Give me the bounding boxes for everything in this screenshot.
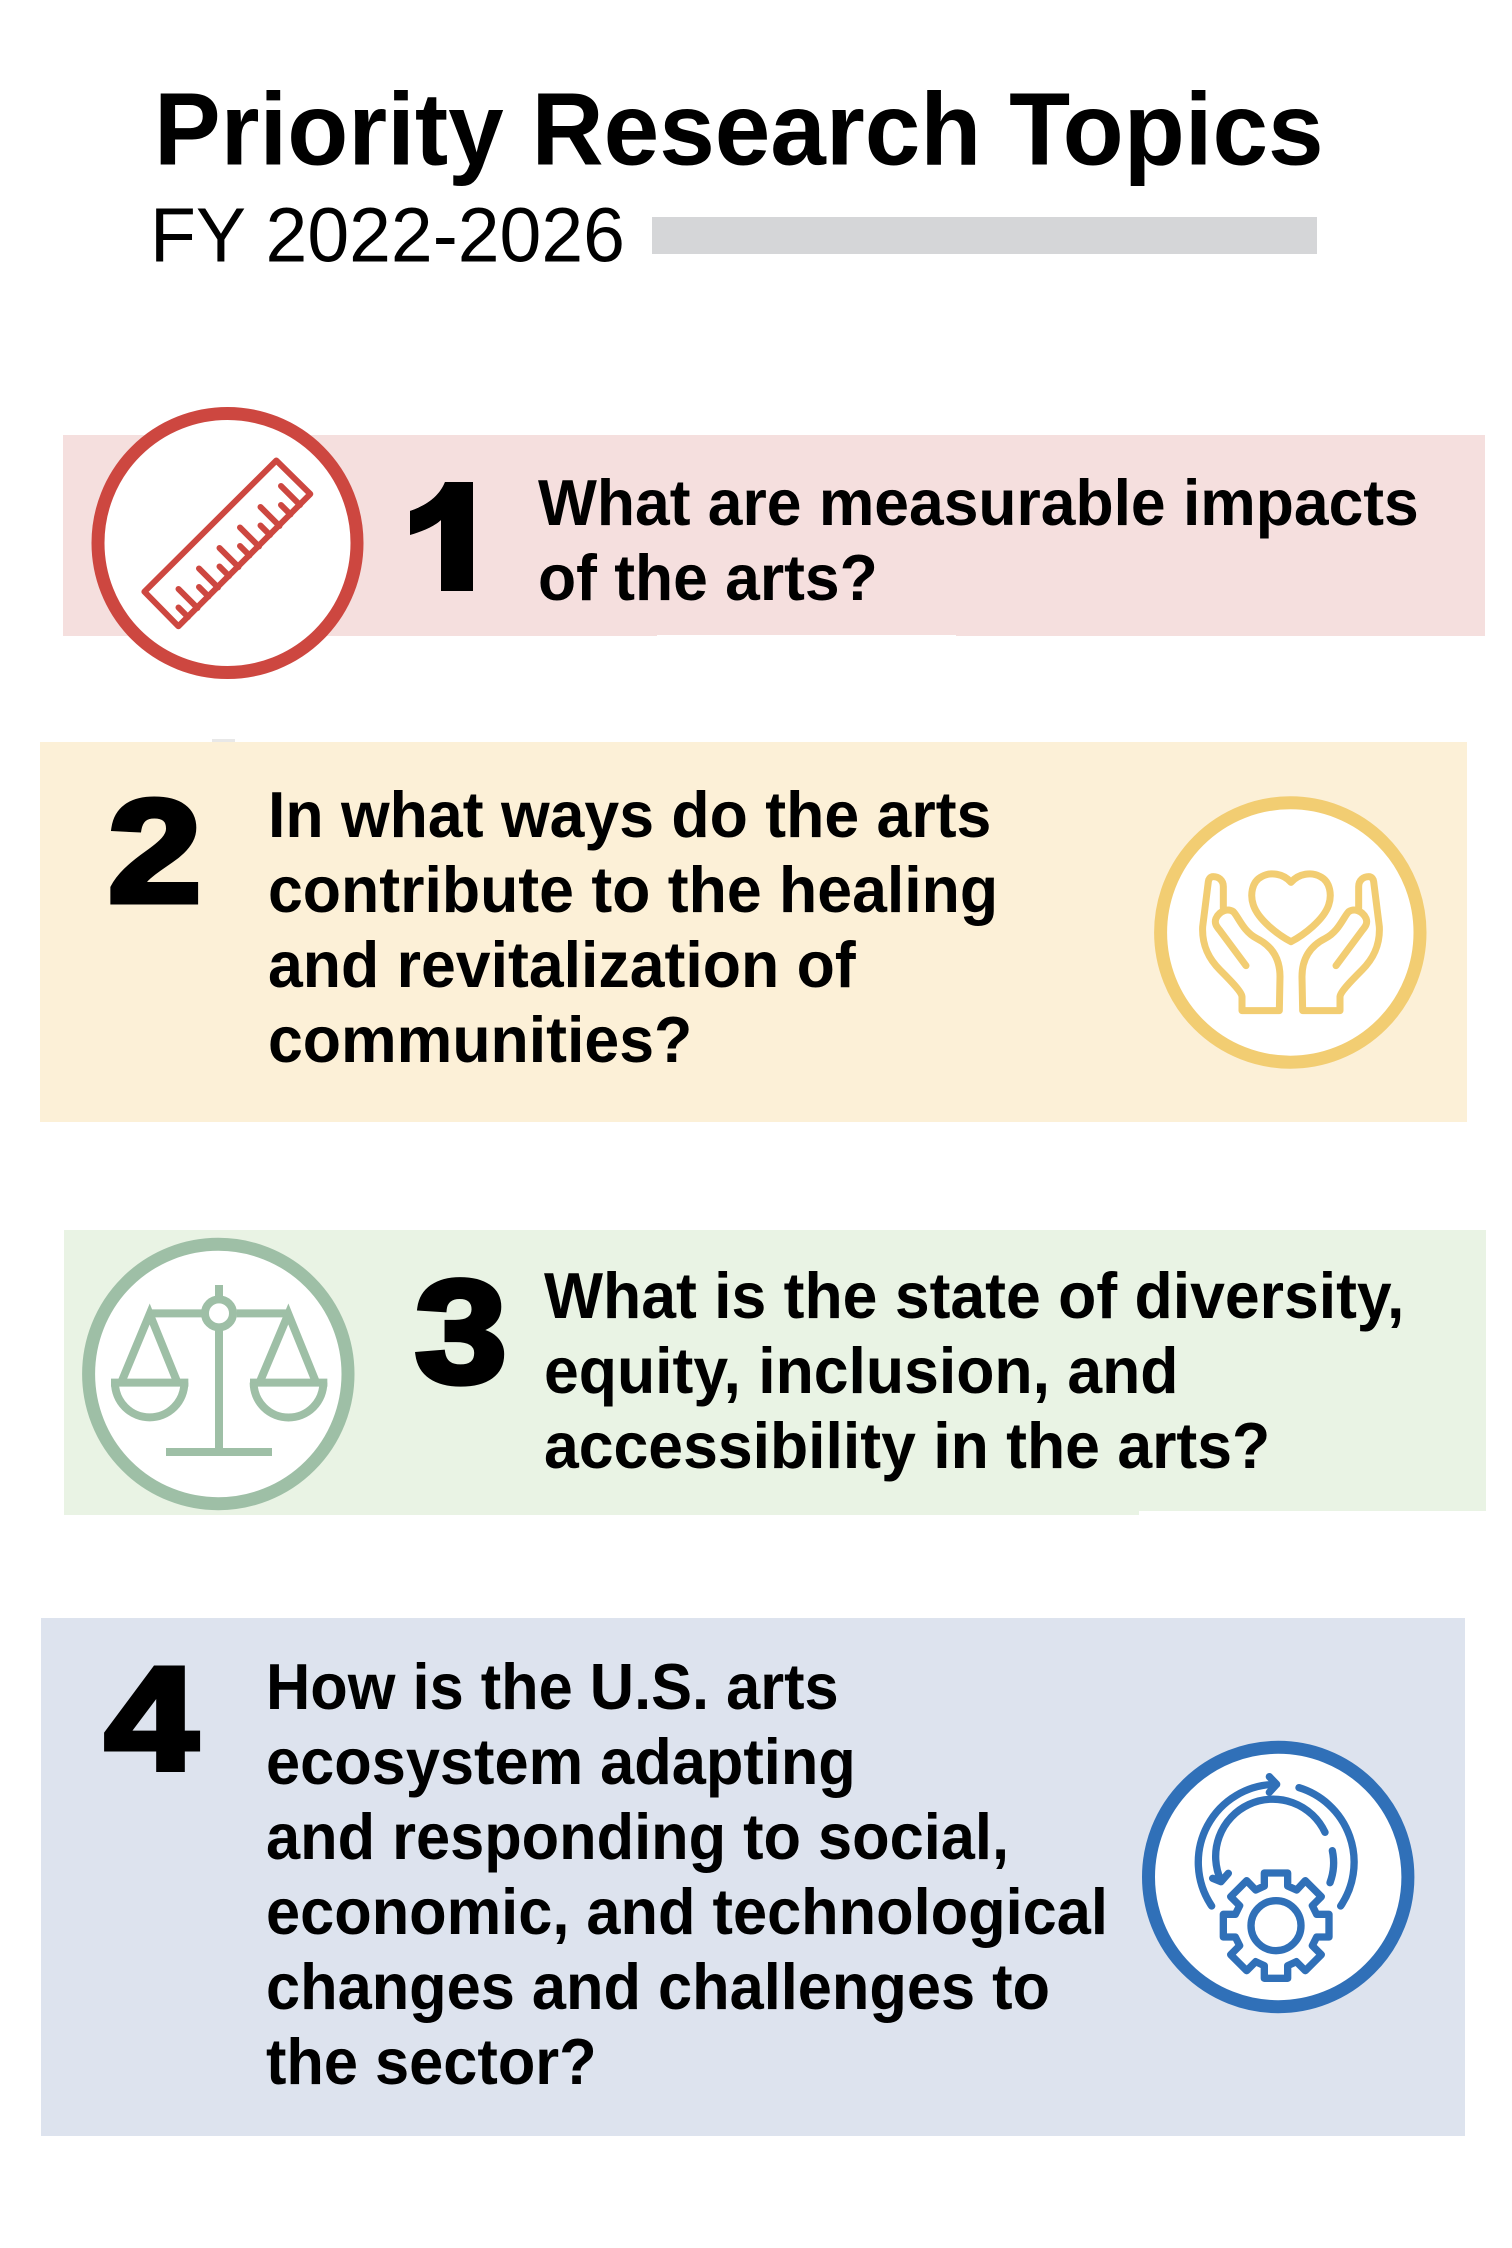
number 1: 1 (393, 447, 485, 631)
question 4: ecosystem adapting (266, 1726, 856, 1798)
panel 1 background (63, 435, 1485, 636)
icon: ruler in red circle (98, 414, 357, 672)
question 4: How is the U.S. arts (266, 1651, 839, 1723)
question 4 (266, 1651, 1108, 2098)
panel 4 background (41, 1618, 1465, 2136)
number 2: 2 (108, 771, 201, 933)
panel 2 background (40, 742, 1467, 1122)
icon: balance scales in green circle (89, 1244, 348, 1504)
question 2: communities? (268, 1003, 692, 1076)
question 4: economic, and technological (266, 1876, 1108, 1948)
question 2: contribute to the healing (268, 853, 998, 926)
icon: hands holding heart in yellow circle (1161, 803, 1420, 1062)
question 3: What is the state of diversity, (544, 1259, 1404, 1332)
number 4: 4 (105, 1638, 198, 1801)
question 3 (544, 1259, 1404, 1482)
tab mark above panel 2 (212, 739, 235, 742)
question 3: equity, inclusion, and (544, 1334, 1179, 1407)
question 1: What are measurable impacts (538, 466, 1419, 539)
panel: topic 4 ecosystem adaptation (41, 1618, 1465, 2136)
question 2: In what ways do the arts (268, 778, 991, 851)
panel 3 background (64, 1230, 1486, 1515)
grey header bar (652, 217, 1317, 254)
question 4: the sector? (266, 2026, 597, 2098)
panel: topic 2 healing and revitalization (40, 739, 1467, 1122)
question 3: accessibility in the arts? (544, 1409, 1270, 1482)
question 1 (538, 466, 1419, 614)
number 3: 3 (415, 1251, 507, 1414)
title: Priority Research Topics (154, 71, 1324, 187)
subtitle: FY 2022-2026 (150, 193, 625, 279)
question 4: and responding to social, (266, 1801, 1009, 1873)
question 2 (268, 778, 998, 1076)
panel: topic 3 diversity, equity, inclusion, accessibility (64, 1230, 1486, 1515)
question 1: of the arts? (538, 541, 878, 614)
question 4: changes and challenges to (266, 1951, 1050, 2023)
question 2: and revitalization of (268, 928, 856, 1001)
panel: topic 1 measurable impacts (63, 414, 1485, 672)
icon: gear with cycle arrows in blue circle (1148, 1747, 1408, 2007)
